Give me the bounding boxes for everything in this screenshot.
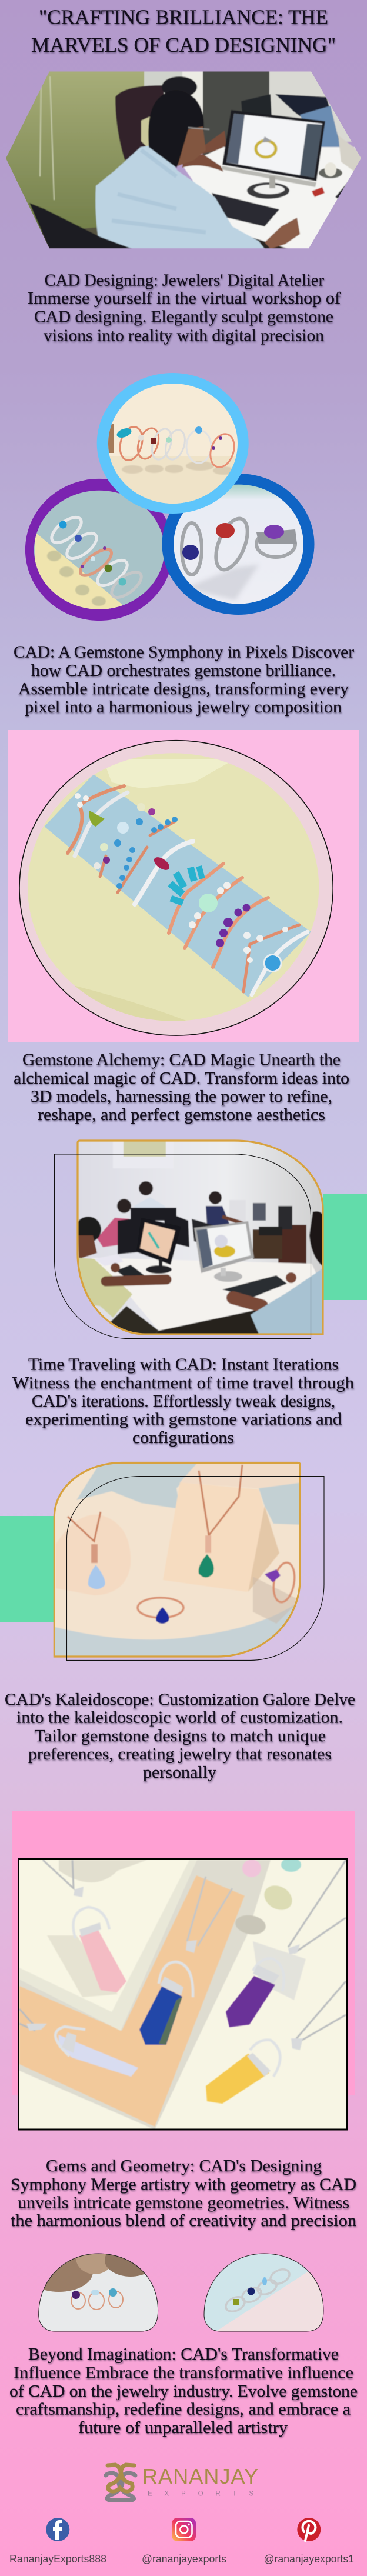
social: Pinterest: @rananjayexports1 — [263, 2553, 354, 2565]
text: Gemstone Symphony: how CAD orchestrates gemstone brilliance. — [31, 662, 336, 680]
green accent block: right — [323, 1194, 367, 1300]
title: "CRAFTING BRILLIANCE: THE — [39, 6, 328, 29]
text: CAD Designing: CAD designing. Elegantly sculpt gemstone — [34, 308, 333, 326]
social: Facebook: RananjayExports888 — [9, 2553, 106, 2565]
text: Beyond Imagination: future of unparalleled artistry — [78, 2419, 288, 2437]
rounded photo: pendants and rings on beige — [53, 1461, 324, 1660]
text: CAD's Kaleidoscope: personally — [143, 1764, 216, 1782]
text: Beyond Imagination: craftsmanship, redefine designs, and embrace a — [16, 2401, 351, 2419]
pink backing rectangle — [12, 1811, 355, 2095]
text: CAD Designing: visions into reality with digital precision — [44, 326, 324, 345]
text: Gemstone Alchemy: alchemical magic of CAD. Transform ideas into — [14, 1069, 349, 1088]
circle photo: light blue ring, row of rings on cream — [97, 373, 249, 514]
text: Time Traveling with CAD: experimenting with gemstone variations and — [25, 1410, 342, 1428]
title: MARVELS OF CAD DESIGNING" — [31, 34, 336, 56]
text: Gemstone Alchemy: reshape, and perfect gemstone aesthetics — [38, 1106, 325, 1124]
icon: pinterest — [297, 2518, 321, 2541]
icon: facebook — [46, 2518, 69, 2541]
circle photo: blue ring, gemstone rings on white — [162, 474, 314, 615]
panel: pink square with oval ring photo — [8, 730, 359, 1042]
text: CAD Designing: Immerse yourself in the virtual workshop of — [28, 289, 341, 308]
text: Gemstone Symphony: CAD: A Gemstone Symphony in Pixels Discover — [14, 643, 355, 661]
framed photo: crystal point pendants — [19, 1858, 347, 2130]
text: Time Traveling with CAD: CAD's iterations. Effortlessly tweak designs, — [32, 1392, 335, 1411]
text: Gems and Geometry: the harmonious blend of creativity and precision — [11, 2212, 356, 2230]
social: Pinterest — [263, 2518, 354, 2565]
text: Gemstone Alchemy: Gemstone Alchemy: CAD Magic Unearth the — [22, 1051, 341, 1069]
text: Beyond Imagination — [9, 2345, 358, 2437]
social: Facebook — [9, 2518, 106, 2565]
text: Time Traveling with CAD: Time Traveling with CAD: Instant Iterations — [28, 1355, 339, 1374]
logo: Rananjay Exports: EXPORTS — [148, 2491, 253, 2498]
text: Gems and Geometry: Symphony Merge artistry with geometry as CAD — [11, 2175, 356, 2194]
text: Time Traveling with CAD: Witness the enchantment of time travel through — [12, 1374, 354, 1392]
logo: Rananjay Exports: RANANJAY — [142, 2464, 258, 2488]
social: Instagram: @rananjayexports — [142, 2553, 226, 2565]
icon: instagram — [172, 2518, 196, 2541]
circle photo: purple ring, rings on teal and yellow — [25, 479, 173, 621]
text: Gemstone Symphony: pixel into a harmonious jewelry composition — [25, 698, 342, 717]
text: Beyond Imagination: Beyond Imagination: CAD's Transformative — [28, 2345, 339, 2364]
green accent block: left — [0, 1516, 55, 1622]
logo mark — [106, 2465, 135, 2500]
rounded photo: CAD team at desks — [54, 1138, 325, 1339]
text: Beyond Imagination: of CAD on the jewelry industry. Evolve gemstone — [9, 2382, 358, 2401]
text: CAD's Kaleidoscope — [5, 1691, 355, 1782]
dome photo: rough gem rings under rocks — [38, 2253, 159, 2332]
text: Gemstone Alchemy: 3D models, harnessing the power to refine, — [31, 1088, 332, 1106]
text: CAD Designing — [28, 272, 341, 345]
text: CAD's Kaleidoscope: Tailor gemstone designs to match unique — [34, 1727, 326, 1745]
text: Gems and Geometry: unveils intricate gemstone geometries. Witness — [18, 2194, 349, 2212]
text: Time Traveling with CAD: configurations — [132, 1429, 234, 1447]
hexagon photo: CAD designer at workstation — [0, 71, 363, 249]
text: CAD's Kaleidoscope: CAD's Kaleidoscope: Customization Galore Delve — [5, 1691, 355, 1709]
logo: Rananjay Exports — [106, 2464, 258, 2500]
text: Gemstone Symphony — [14, 643, 355, 717]
text: CAD's Kaleidoscope: into the kaleidoscopic world of customization. — [16, 1708, 343, 1727]
text: Gemstone Symphony: Assemble intricate designs, transforming every — [18, 680, 349, 698]
text: Time Traveling with CAD — [12, 1355, 354, 1447]
text: Gems and Geometry: Gems and Geometry: CAD's Designing — [46, 2157, 322, 2175]
title — [31, 6, 336, 56]
text: Beyond Imagination: Influence Embrace the transformative influence — [14, 2364, 353, 2382]
text: Gems and Geometry — [11, 2157, 356, 2230]
dome photo: silver rings on blue and pink — [203, 2253, 323, 2332]
text: CAD Designing: CAD Designing: Jewelers' Digital Atelier — [45, 272, 325, 290]
text: CAD's Kaleidoscope: preferences, creating jewelry that resonates — [28, 1745, 332, 1764]
social: Instagram — [142, 2518, 226, 2565]
text: Gemstone Alchemy — [14, 1051, 349, 1124]
